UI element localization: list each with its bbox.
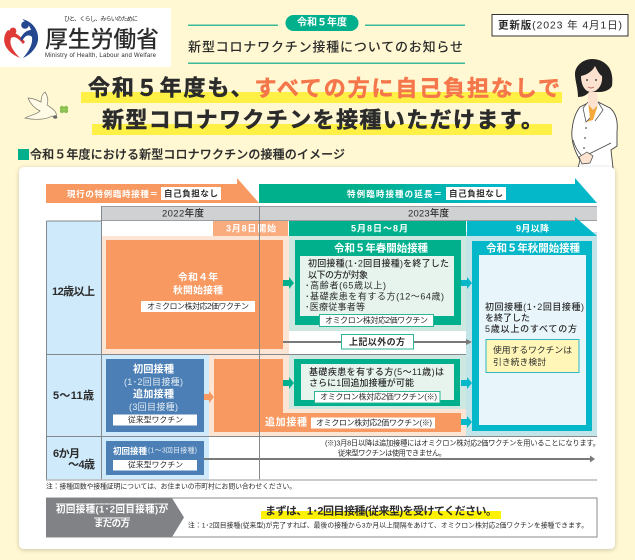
panel: autumn 2022 vaccination: 秋開始接種 (173, 284, 223, 296)
panel: 6 months to 4 years: (1〜3回目接種) (148, 446, 197, 454)
header: fiscal year pill and notice title: 新型コロナワクチン接種についてのお知らせ (188, 40, 463, 54)
row labels column: 〜4歳 (68, 457, 95, 471)
update date box: 更新版(2023 年 4月1日) (498, 18, 622, 32)
panel: spring 2023 vaccination: ･高齢者(65歳以上) (305, 280, 386, 290)
row labels column: 6か月 (53, 447, 80, 460)
arrow: current special vaccination (46, 178, 259, 203)
footnote: contact municipality: 注：接種回数や接種証明については、お住まいの市町村にお問い合わせください。 (46, 482, 296, 490)
doctor illustration (572, 59, 617, 168)
panel: 5 to 11 underlying conditions (289, 354, 466, 409)
arrow: extension of special vaccination: 自己負担なし (449, 188, 503, 198)
panel: autumn 2023 column: 令和５年秋開始接種 (486, 242, 580, 254)
panel: autumn 2023 column: 5歳以上のすべての方 (485, 323, 577, 334)
panel: 5 to 11 underlying conditions: 基礎疾患を有する方(5〜11歳)は (309, 366, 444, 377)
panel: autumn 2022 vaccination (101, 236, 289, 354)
arrow: others line (283, 334, 472, 349)
footnote: asterisk: (※)3月8日以降は追加接種にはオミクロン株対応2価ワクチンを用いることになります。 (325, 438, 600, 448)
panel: 5 to 11 first and additional doses: 初回接種 (133, 362, 174, 376)
panel: spring 2023 vaccination: 令和５年春開始接種 (334, 242, 428, 254)
column header: March 8 start: 3月8日開始 (226, 222, 276, 234)
logo: Ministry of Health, Labour and Welfare (0, 8, 171, 67)
footnote: asterisk (325, 438, 600, 458)
panel: 6 months to 4 years: 初回接種 (113, 446, 147, 456)
year header bar: 2023年度 (408, 208, 449, 220)
panel: 5 to 11 first and additional doses: 追加接種 (133, 388, 174, 400)
panel: spring 2023 vaccination (289, 236, 466, 331)
panel: 5 to 11 first and additional doses: (1･2回目接種) (124, 376, 183, 387)
arrow: under-5 timeline (204, 456, 595, 462)
update date box (492, 14, 628, 36)
panel: 5 to 11 underlying conditions: オミクロン株対応2価ワクチン(※) (320, 392, 437, 402)
year header bar (101, 206, 597, 221)
title highlights (81, 92, 562, 135)
arrow: extension of special vaccination (259, 178, 597, 203)
arrow: current special vaccination: 自己負担なし (164, 188, 218, 198)
panel: spring 2023 vaccination: 以下の方が対象 (308, 269, 368, 280)
row labels column (46, 221, 101, 480)
title (88, 76, 560, 132)
logo: Ministry of Health, Labour and Welfare: Ministry of Health, Labour and Welfare (45, 53, 157, 59)
column header: May 8 to August (289, 221, 466, 236)
title: 新型コロナワクチンを接種いただけます。 (102, 108, 543, 132)
panel: 5 to 11 first and additional doses (101, 354, 209, 436)
panel: autumn 2023 column: 使用するワクチンは (493, 344, 572, 355)
callout: not yet had first doses: まだの方 (94, 518, 130, 530)
arrow: current special vaccination: 現行の特例臨時接種＝ (67, 189, 158, 199)
panel: autumn 2023 column (466, 217, 597, 436)
panel: spring 2023 vaccination: オミクロン株対応2価ワクチン (325, 315, 428, 325)
arrows: transitions between periods (204, 277, 472, 428)
column header: May 8 to August: 5月8日〜8月 (351, 224, 408, 234)
panel: spring 2023 vaccination: ･医療従事者等 (305, 301, 365, 312)
footnote: asterisk: 従来型ワクチンは使用できません。 (338, 448, 446, 458)
callout: not yet had first doses: 初回接種(1･2回目接種)が (56, 504, 168, 516)
panel: 5 to 11 additional dose (209, 354, 466, 436)
panel: autumn 2022 vaccination: オミクロン株対応2価ワクチン (147, 301, 249, 311)
icon: bird with clover (25, 92, 68, 119)
panel: 6 months to 4 years: 従来型ワクチン (128, 460, 183, 470)
panel: 5 to 11 additional dose: オミクロン株対応2価ワクチン(※) (316, 418, 432, 428)
callout: not yet had first doses: まずは、1･2回目接種(従来型)を受けてください。 (265, 504, 497, 518)
panel: 6 months to 4 years (101, 436, 209, 480)
row labels column: 5〜11歳 (53, 388, 94, 402)
arrow: others line: 上記以外の方 (349, 336, 405, 347)
header: fiscal year pill and notice title (188, 15, 465, 64)
table grid lines (46, 206, 597, 480)
callout: not yet had first doses (46, 498, 597, 537)
callout: not yet had first doses: 注：1･2回目接種(従来型)が完了すれば、最後の接種から3か月以上間隔をあけて、オミクロン株対応2価ワクチンを接種できます。 (188, 520, 588, 530)
panel: 5 to 11 first and additional doses: 従来型ワクチン (128, 414, 183, 424)
panel: autumn 2023 column: 初回接種(1･2回目接種) (485, 301, 584, 312)
panel: spring 2023 vaccination: 初回接種(1･2回目接種)を終了した (308, 258, 449, 268)
logo: Ministry of Health, Labour and Welfare: 厚生労働省 (45, 26, 159, 52)
header: fiscal year pill and notice title: 令和５年度 (297, 16, 347, 28)
section heading: 令和５年度における新型コロナワクチンの接種のイメージ (30, 146, 345, 162)
panel: 5 to 11 underlying conditions: さらに1回追加接種が可能 (309, 377, 414, 388)
title: 令和５年度も、すべての方に自己負担なしで (88, 76, 560, 100)
panel: spring 2023 vaccination: ･基礎疾患を有する方(12〜64歳) (305, 290, 444, 302)
logo: Ministry of Health, Labour and Welfare: ひと、くらし、みらいのために (64, 16, 138, 23)
column header: March 8 start (213, 221, 288, 236)
panel: autumn 2022 vaccination: 令和４年 (178, 270, 218, 284)
arrow: extension of special vaccination: 特例臨時接種の延長＝ (347, 189, 442, 199)
panel: main white card (19, 167, 615, 549)
panel: 5 to 11 first and additional doses: (3回目接種) (129, 401, 178, 412)
year header bar: 2022年度 (162, 208, 204, 220)
panel: 5 to 11 additional dose: 追加接種 (265, 416, 307, 428)
panel: autumn 2023 column: 9月以降 (516, 222, 549, 234)
panel: autumn 2023 column: を終了した (485, 312, 530, 323)
panel: autumn 2023 column: 引き続き検討 (493, 356, 546, 367)
row labels column: 12歳以上 (52, 284, 95, 298)
